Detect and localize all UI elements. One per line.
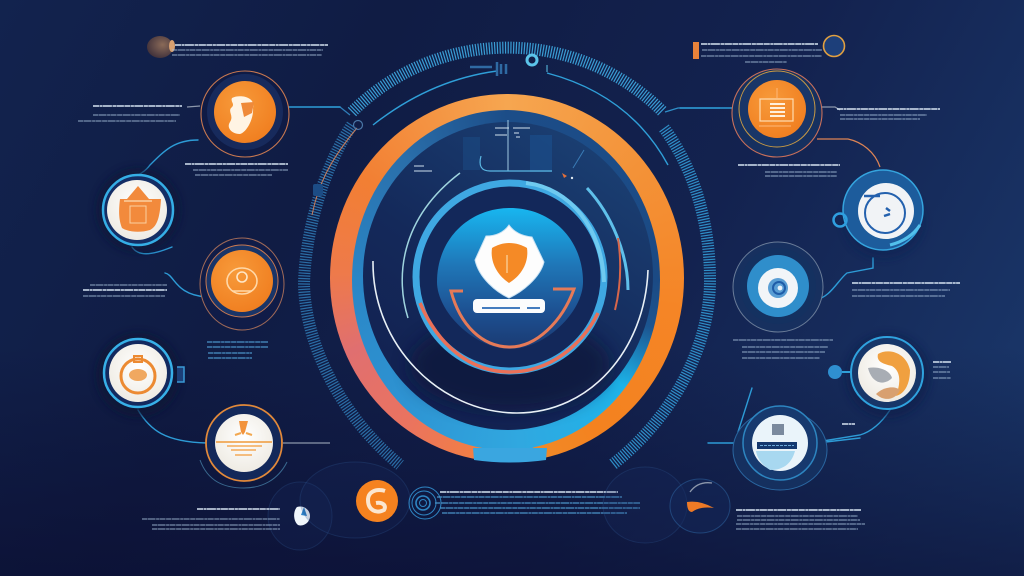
icon: orange bag — [119, 186, 161, 232]
icon: shield — [475, 225, 544, 298]
icon: camera lens — [227, 268, 257, 294]
icon: orange tent — [239, 421, 248, 435]
right tick ring segment — [612, 108, 720, 465]
item: orange circle left 3 — [200, 238, 284, 330]
text: bottom left — [142, 509, 280, 529]
text: right 4 side — [933, 362, 951, 378]
item: orange bottom circle — [300, 462, 410, 538]
item: blue eye circle right 3 — [733, 242, 823, 332]
bottom notch of ring — [473, 448, 547, 462]
item: top right ring with text — [693, 36, 844, 62]
lower orange bowl arc — [420, 303, 598, 372]
text: bottom right — [736, 510, 865, 529]
icon: blue loop — [865, 193, 905, 233]
item: top-left brown ball with text — [147, 36, 328, 58]
left tick ring segment — [304, 107, 400, 465]
icon: white swirl — [368, 490, 385, 512]
connector lines right — [680, 107, 890, 443]
item: orange streak bubble — [603, 467, 730, 543]
text: bottom centre — [435, 492, 640, 513]
icon: concentric swirl — [409, 487, 441, 519]
connector lines left — [132, 106, 340, 443]
text: left 1 lower — [185, 164, 288, 175]
text: left 3 lower — [207, 342, 268, 358]
icon: orange and grey figure — [878, 351, 910, 396]
core blue disc — [437, 208, 583, 349]
orange U bracket — [451, 289, 574, 347]
icon: pocket watch — [121, 359, 155, 393]
item: white circle right 5 — [733, 406, 827, 490]
blue inner ring — [352, 110, 660, 450]
item: white circle right 2 — [834, 170, 924, 258]
central shadow — [410, 319, 610, 411]
icon: window — [760, 99, 793, 121]
text: right 3 — [852, 283, 960, 296]
thin arcs in disc — [373, 173, 648, 413]
central emblem — [416, 183, 604, 372]
dark central disc — [363, 122, 653, 430]
item: white circle left 5 — [200, 405, 287, 488]
icon: device base — [473, 299, 545, 313]
text: left 3 — [83, 285, 167, 296]
item: orange circle right 1 — [732, 69, 822, 157]
icon: white blob — [229, 96, 253, 134]
text: right 1 — [837, 109, 940, 119]
text: left 1 — [78, 106, 182, 121]
cyan ring — [416, 183, 604, 371]
top tick ring segment — [352, 48, 668, 165]
item: white circle left 4 — [96, 333, 184, 417]
icon: eye — [768, 278, 788, 298]
item: small blue icon bubble — [268, 482, 332, 550]
item: orange circle left 1 — [201, 71, 289, 157]
inner panel details: dashboard — [414, 120, 584, 179]
icon: document card — [772, 424, 784, 435]
item: white circle right 4 — [828, 334, 930, 418]
item: white circle left 2 — [96, 168, 180, 252]
text: small tag — [842, 423, 855, 425]
outer orange gradient ring — [330, 94, 684, 462]
text: right 3 lower — [733, 340, 833, 358]
text: right 1 lower — [738, 165, 840, 176]
